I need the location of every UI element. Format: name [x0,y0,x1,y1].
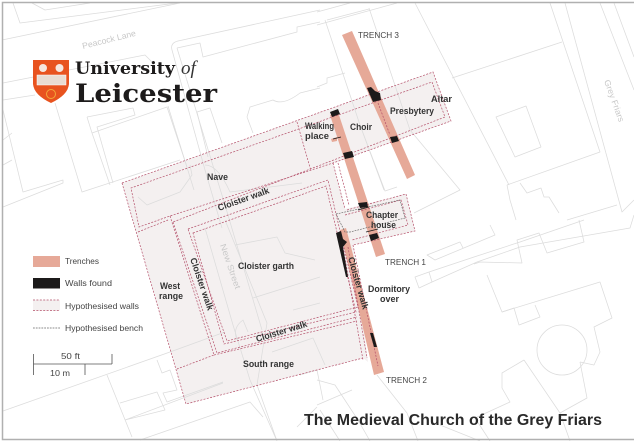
area labels: place [305,131,329,141]
area labels: Altar [431,94,452,104]
area labels: Cloister walk [346,256,371,311]
wordmark: University [75,59,176,79]
area labels: West [160,281,180,291]
area labels: Choir [350,122,372,132]
logo: University of Leicester [33,58,218,108]
legend: Hypothesised walls [65,301,139,311]
logo: University of Leicester: Leicester [75,79,218,108]
hypothesised walls [122,72,451,404]
scale bar: 10 m [50,368,70,378]
hypothesised bench [336,200,405,232]
area labels: Walking [305,121,334,131]
area labels: Nave [207,172,228,182]
legend [33,256,143,333]
logo: University of Leicester: of [181,58,198,79]
area labels: Cloister walk [188,256,216,313]
trenches [330,31,415,375]
area labels: house [371,220,396,230]
trench labels: TRENCH 3 [358,30,399,40]
area labels: Presbytery [390,106,434,116]
street label: New Street: New Street [218,242,243,291]
church footprint fill [122,72,451,404]
walls found [330,87,399,347]
legend: Walls found [65,278,112,288]
area labels: range [159,291,183,301]
icon: university shield [33,60,69,103]
legend: Trenches [65,256,99,266]
street label: Grey Friars: Grey Friars [602,78,627,123]
trench labels: TRENCH 2 [386,375,427,385]
area labels: South range [243,359,294,369]
area labels [159,94,452,369]
area labels: Dormitory [368,284,410,294]
title: The Medieval Church of the Grey Friars [304,412,602,429]
scale bar [34,351,112,378]
area labels: Cloister walk [216,185,271,213]
area labels: Cloister garth [238,261,294,271]
area labels: Cloister walk [255,319,309,344]
trench labels: TRENCH 1 [385,257,426,267]
scale bar: 50 ft [61,351,81,361]
area labels: Chapter [366,210,398,220]
street label: Peacock Lane: Peacock Lane [81,28,137,51]
area labels: over [380,294,399,304]
trench labels [358,30,427,385]
legend: Hypothesised bench [65,323,143,333]
